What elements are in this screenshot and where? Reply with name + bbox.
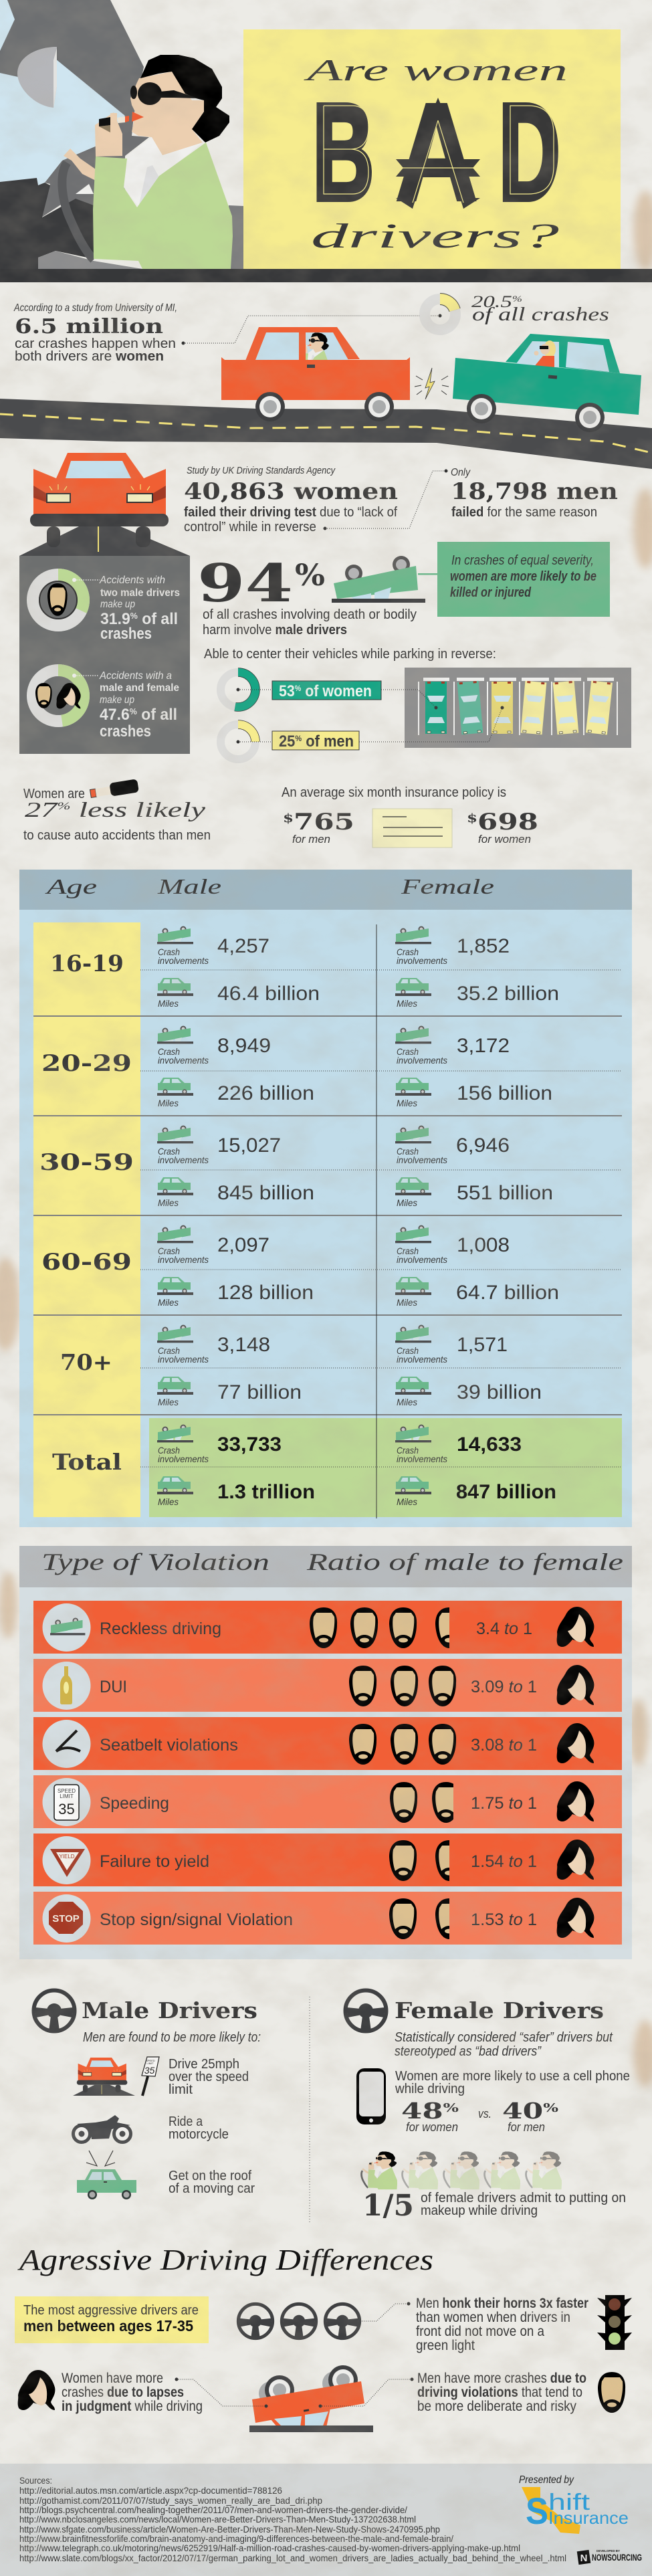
- parking lot illustration: [405, 668, 631, 748]
- intro text: Men are found to be more likely to:: [83, 2030, 261, 2045]
- row: 16-19: Miles: [158, 998, 179, 1009]
- label: 25% of men: [272, 731, 359, 751]
- stat: 27% less likely: %: [57, 801, 71, 812]
- label: 47.6%: crashes: [100, 722, 151, 740]
- stat: 94%: 94: [197, 553, 293, 614]
- row: DUI: 3.09 to 1: [471, 1678, 537, 1696]
- logo: Nowsourcing: DEVELOPED BY: [596, 2549, 620, 2553]
- row: failure to yield: 1.54 to 1: [471, 1852, 537, 1871]
- label: 47.6%: make up: [100, 694, 134, 706]
- logo: Shift Insurance: Presented by: [519, 2474, 574, 2486]
- callout: crash severity: In crashes of equal severity,: [451, 553, 594, 568]
- text: men honk: [416, 2296, 588, 2353]
- stat: 6.5 million crashes: both drivers are women: [15, 349, 164, 364]
- label: 47.6%: [99, 670, 179, 740]
- connector to donut: [182, 316, 440, 345]
- row: 20-29: Miles: [158, 1098, 179, 1108]
- row: 20-29: Crash: [397, 1046, 419, 1057]
- row: 30-59: 6,946: [456, 1134, 510, 1157]
- stat: 6.5 million crashes: [13, 302, 177, 364]
- row: stop sign violation: 1.53 to 1: [471, 1910, 537, 1929]
- sources list: http://blogs.psychcentral.com/healing-together/2011/07/men-and-women-drivers-the-gender-divide/: [19, 2504, 407, 2515]
- text: drive 25mph: over the speed: [169, 2070, 249, 2084]
- sources list: http://gothamist.com/2011/07/07/study_says_women_really_are_bad_dri.php: [19, 2495, 322, 2506]
- section: female drivers: [345, 1991, 630, 2223]
- price for women: [467, 809, 538, 846]
- text: get on the roof: Get on the roof: [169, 2169, 251, 2183]
- green car: [453, 334, 641, 432]
- stat: 27% less likely: less likely: [71, 797, 206, 821]
- callout: most aggressive drivers: men between ages 17-35: [23, 2317, 193, 2335]
- age column: [33, 922, 140, 1517]
- logo: Shift Insurance: S: [526, 2490, 548, 2532]
- sources list: http://www.slate.com/blogs/xx_factor/2012/07/17/german_parking_lot_and_women_drivers_are_ladies_actually_bad_behind_the_wheel_.html: [19, 2553, 566, 2563]
- text: ride a motorcycle: Ride a: [169, 2114, 203, 2129]
- label: 53% of women: %: [295, 684, 302, 693]
- stat: 94%: of all crashes involving death or bodily: [203, 607, 417, 622]
- row: 20-29: involvements: [397, 1055, 447, 1066]
- row: speeding: 1.75 to 1: [471, 1794, 537, 1813]
- row: 30-59: 15,027: [217, 1134, 281, 1157]
- text: drive 25mph: Drive 25mph: [169, 2057, 239, 2072]
- row: 60-69: Crash: [397, 1246, 419, 1256]
- row: 16-19: involvements: [158, 955, 209, 966]
- row: 60-69: Miles: [158, 1297, 179, 1308]
- text: cell phone use: [395, 2069, 630, 2096]
- stat: 27% less likely: 27: [25, 797, 46, 821]
- stat: 1/5 makeup: [362, 2189, 626, 2223]
- stat: 1/5 makeup: 1/5: [362, 2189, 414, 2223]
- row: reckless driving: Reckless driving: [100, 1619, 221, 1638]
- stat: 1/5 makeup: makeup while driving: [421, 2203, 538, 2218]
- total highlight: [149, 1418, 622, 1517]
- stat: 48% vs 40%: for women: [406, 2120, 458, 2134]
- text: women lapses: in judgment while driving: [62, 2399, 203, 2414]
- row: reckless driving: 3.4 to 1: [476, 1619, 532, 1638]
- stat: 48% vs 40%: 40: [502, 2098, 533, 2124]
- row: failure to yield: Failure to yield: [100, 1852, 209, 1871]
- violations header: Ratio of male to female: [306, 1549, 623, 1575]
- row: speeding: 35: [58, 1801, 75, 1817]
- row: 70+: involvements: [158, 1354, 209, 1365]
- panel: violations ratio table: [19, 1546, 632, 1959]
- sources list: http://editorial.autos.msn.com/article.aspx?cp-documentid=788126: [19, 2485, 282, 2496]
- connectors to overturned car: [175, 2377, 413, 2408]
- icon: overturned green car: [332, 556, 425, 603]
- logo: Shift Insurance: [519, 2474, 629, 2534]
- row: 70+: 77 billion: [217, 1381, 302, 1403]
- price for women: $: [467, 811, 477, 825]
- footer band: [0, 2464, 652, 2576]
- row: 16-19: 46.4 billion: [217, 983, 320, 1005]
- pictogram: 1 in 5 women: [362, 2152, 562, 2189]
- row: 30-59: involvements: [158, 1155, 209, 1165]
- row: Total: Total: [52, 1449, 122, 1475]
- panel: crash table by age: [19, 870, 632, 1527]
- row: failure to yield: YIELD: [59, 1854, 75, 1860]
- row: 60-69: [41, 1225, 559, 1308]
- row: speeding: [33, 1775, 622, 1828]
- icon: man head: [598, 2372, 625, 2413]
- stat: 40,863 women failed: 40,863 women: [184, 478, 398, 505]
- row: Total: 14,633: [457, 1433, 522, 1456]
- icon: green car: [77, 2169, 136, 2199]
- stat: 40,863 women failed: Study by UK Driving Standards Agency: [187, 465, 336, 476]
- row: 60-69: Crash: [158, 1246, 180, 1256]
- text: ride a motorcycle: [169, 2114, 229, 2142]
- row: Total: 847 billion: [456, 1481, 556, 1503]
- row: 30-59: involvements: [397, 1155, 447, 1165]
- icon: car and speed limit sign: SPEED: [146, 2059, 155, 2062]
- row: Total: involvements: [158, 1454, 209, 1464]
- icon: cell phone: [356, 2068, 386, 2124]
- text: women lapses: Women have more: [62, 2371, 163, 2386]
- row: Total: Crash: [397, 1445, 419, 1456]
- label: 31.9%: of all: [138, 610, 178, 628]
- row: 16-19: 1,852: [457, 935, 510, 957]
- row: 16-19: Crash: [158, 947, 180, 957]
- stat: 48% vs 40%: vs.: [478, 2107, 492, 2120]
- stat: 27% less likely: to cause auto accidents than men: [23, 828, 211, 843]
- stat: insurance cost: [282, 785, 538, 848]
- stat: 27% less likely: Women are: [23, 787, 85, 801]
- row: 16-19: 35.2 billion: [457, 983, 559, 1005]
- row: 20-29: 20-29: [41, 1050, 132, 1077]
- row: 30-59: [39, 1125, 553, 1208]
- row: DUI: DUI: [100, 1678, 127, 1696]
- row: seatbelt violations: [33, 1717, 622, 1770]
- stat: 6.5 million crashes: According to a study from University of MI,: [13, 302, 177, 314]
- stat: insurance cost: An average six month insurance policy is: [282, 785, 506, 800]
- row: 20-29: 3,172: [457, 1035, 510, 1057]
- icon: lipstick: [90, 779, 139, 799]
- label: 47.6%: 47.6: [100, 706, 131, 724]
- callout: crash severity: women are more likely to be: [450, 569, 596, 584]
- section: male drivers: [33, 1991, 261, 2199]
- stat: 94%: %: [295, 559, 325, 593]
- donut chart: 25% of men: [221, 724, 255, 759]
- row: 60-69: 2,097: [217, 1234, 269, 1256]
- row: 30-59: Crash: [397, 1146, 419, 1157]
- violations header: [19, 1546, 632, 1587]
- intro text: Statistically considered “safer” drivers but: [395, 2030, 613, 2045]
- row: speeding: SPEED: [58, 1788, 76, 1794]
- label: 47.6%: Accidents with a: [99, 670, 172, 682]
- hero illustration: woman driving and applying lipstick: [0, 0, 243, 269]
- row: 16-19: Crash: [397, 947, 419, 957]
- row: seatbelt violations: 3.08 to 1: [471, 1736, 537, 1755]
- row: 70+: [60, 1324, 542, 1407]
- heading: Female Drivers: Female Drivers: [395, 1997, 604, 2023]
- price for women: 698: [477, 809, 538, 835]
- donut chart: 31.9% two male drivers: [33, 575, 100, 625]
- label: 31.9%: crashes: [100, 625, 152, 643]
- row: 60-69: involvements: [397, 1254, 447, 1265]
- intro text: [395, 2030, 613, 2059]
- row: speeding: Speeding: [100, 1794, 169, 1813]
- row: Total: [52, 1425, 556, 1507]
- intro text: stereotyped as “bad drivers”: [395, 2044, 542, 2059]
- stat: 48% vs 40%: 48: [401, 2098, 432, 2124]
- text: men honk: Men honk their horns 3x faster: [416, 2296, 588, 2311]
- row: 30-59: Crash: [158, 1146, 180, 1157]
- row: 16-19: involvements: [397, 955, 447, 966]
- text: women lapses: crashes due to lapses: [62, 2385, 184, 2400]
- connector women to men: [324, 470, 448, 530]
- row: stop sign violation: [33, 1892, 622, 1945]
- label: 31.9%: Accidents with: [99, 575, 165, 586]
- price for women: for women: [478, 833, 531, 846]
- label: 53% of women: [272, 681, 381, 700]
- panel: accident share donuts: [19, 556, 190, 754]
- donut chart: 53% of women: [221, 672, 255, 707]
- donut chart: 47.6% male and female: [33, 670, 99, 721]
- text: men honk: green light: [416, 2338, 475, 2353]
- text: drive 25mph: limit: [169, 2082, 193, 2097]
- table header: Male: [157, 874, 221, 898]
- row: 16-19: 4,257: [217, 935, 269, 957]
- red car: [221, 327, 410, 421]
- text: get on the roof: of a moving car: [169, 2181, 255, 2196]
- text: cell phone use: Women are more likely to use a cell phone: [395, 2069, 630, 2084]
- row: 20-29: [41, 1026, 552, 1108]
- label: 47.6%: male and female: [100, 682, 179, 694]
- row: failure to yield: [33, 1834, 622, 1886]
- row: stop sign violation: STOP: [52, 1913, 80, 1924]
- row: 60-69: 128 billion: [217, 1282, 314, 1304]
- connectors from labels to parked cars: [238, 690, 504, 742]
- icon: steering wheel: [345, 1991, 387, 2031]
- heading: Male Drivers: Male Drivers: [82, 1997, 257, 2023]
- road: [0, 399, 652, 469]
- paper stains: [0, 191, 652, 2087]
- callout: crash severity: killed or injured: [450, 585, 532, 600]
- label: 31.9%: two male drivers: [100, 587, 180, 599]
- table header: Female: [401, 874, 494, 898]
- stat: 40,863 women failed: control” while in reverse: [184, 520, 316, 534]
- stat: 18,798 men failed: Only: [451, 467, 471, 478]
- text: women lapses: [62, 2371, 203, 2414]
- stat: 27% less likely: [23, 787, 211, 843]
- label: 31.9%: make up: [100, 599, 135, 610]
- row: 60-69: involvements: [158, 1254, 209, 1265]
- row: 70+: Crash: [158, 1345, 180, 1356]
- label: 31.9%: %: [130, 611, 138, 621]
- price for men: [283, 809, 354, 846]
- connector: wheels to honk text: [362, 2302, 411, 2321]
- icon: motorcycle: [74, 2115, 131, 2142]
- row: 30-59: Miles: [397, 1197, 417, 1208]
- row: 30-59: 845 billion: [217, 1182, 314, 1204]
- label: 47.6%: %: [130, 706, 137, 716]
- label: 53% of women: of women: [301, 682, 372, 700]
- row: 16-19: Miles: [397, 998, 417, 1009]
- row: Total: Miles: [158, 1496, 179, 1507]
- title line: Are women: Are women: [303, 53, 568, 87]
- price for men: for men: [292, 833, 330, 846]
- stat: 18,798 men failed: failed for the same reason: [451, 505, 597, 520]
- row: 70+: 3,148: [217, 1334, 270, 1356]
- row: 60-69: 64.7 billion: [456, 1282, 559, 1304]
- row: Total: Miles: [397, 1496, 417, 1507]
- icon: three steering wheels: [238, 2304, 360, 2339]
- row: Total: Crash: [158, 1445, 180, 1456]
- stat: 94%: harm involve male drivers: [203, 623, 347, 637]
- row: Total: involvements: [397, 1454, 447, 1464]
- row: 70+: 1,571: [457, 1334, 508, 1356]
- heading: aggressive driving differences: Agressive Driving Differences: [17, 2244, 433, 2276]
- stat: 18,798 men failed: [451, 467, 618, 520]
- text: men honk: front did not move on a: [416, 2324, 544, 2339]
- icon: policy document: [372, 809, 452, 848]
- title word: BAD: B: [312, 76, 374, 229]
- label: 25% of men: 25: [279, 732, 297, 751]
- price for men: $: [283, 811, 294, 825]
- stat: 18,798 men failed: 18,798 men: [451, 478, 618, 505]
- dark band: [0, 269, 652, 282]
- logo: Nowsourcing: N: [580, 2553, 587, 2564]
- stat: 6.5 million crashes: 6.5 million: [15, 315, 163, 338]
- row: stop sign violation: Stop sign/signal Violation: [100, 1910, 293, 1929]
- sources list: http://www.brainfitnessforlife.com/brain-anatomy-and-imaging/9-differences-between-the-male-and-female-brain/: [19, 2533, 453, 2544]
- icon: traffic light: [597, 2295, 632, 2350]
- sources list: http://www.sfgate.com/business/article/Women-Are-Better-Drivers-Than-Men-New-Study-Shows-2470995.php: [19, 2524, 440, 2535]
- icon: car and speed limit sign: [73, 2057, 159, 2096]
- row: 20-29: Crash: [158, 1046, 180, 1057]
- row: 70+: Miles: [397, 1397, 417, 1407]
- label: 31.9%: [99, 575, 180, 643]
- crash spark: [415, 368, 449, 399]
- row: 20-29: Miles: [397, 1098, 417, 1108]
- text: men violations: be more deliberate and risky: [417, 2399, 576, 2414]
- text: men honk: than women when drivers in: [416, 2310, 570, 2325]
- label: 20.5% of all crashes: of all crashes: [472, 304, 609, 325]
- row: 20-29: 8,949: [217, 1035, 271, 1057]
- icon: steering wheel: [33, 1991, 75, 2031]
- logo: Shift Insurance: hift: [548, 2490, 590, 2515]
- stat: 1/5 makeup: of female drivers admit to putting on: [421, 2191, 626, 2205]
- donut chart: 20.5%: [425, 299, 455, 330]
- row: DUI: [33, 1659, 622, 1712]
- sources list: http://www.nbclosangeles.com/news/local/Women-are-Better-Drivers-Than-Men-Study-137202638.html: [19, 2514, 416, 2524]
- stat: 40,863 women failed: failed their driving test due to “lack of: [184, 505, 397, 520]
- text: men violations: Men have more crashes due to: [417, 2371, 586, 2386]
- logo: Nowsourcing: [577, 2549, 642, 2565]
- icon: woman head: [18, 2370, 55, 2410]
- row: 30-59: 30-59: [39, 1149, 134, 1176]
- icon: car and speed limit sign: LIMIT: [146, 2062, 154, 2065]
- row: Total: 1.3 trillion: [217, 1481, 315, 1503]
- icon: arrows pointing to car roof: [86, 2151, 115, 2166]
- label: 25% of men: of men: [302, 732, 354, 751]
- stat: 48% vs 40%: %: [443, 2101, 459, 2115]
- title panel: [243, 29, 621, 269]
- label: 31.9%: 31.9: [100, 610, 132, 628]
- title word: BAD: [312, 75, 560, 229]
- label: 25% of men: %: [295, 734, 302, 743]
- row: 20-29: 156 billion: [457, 1082, 552, 1104]
- table header: Age: [45, 874, 97, 898]
- row: 70+: 70+: [60, 1349, 112, 1375]
- callout: most aggressive drivers: The most aggressive drivers are: [23, 2303, 199, 2318]
- row: 70+: Crash: [397, 1345, 419, 1356]
- front view of red car on road: [19, 453, 190, 556]
- row: 30-59: Miles: [158, 1197, 179, 1208]
- sources list: Sources:: [19, 2475, 52, 2486]
- row: 16-19: [50, 926, 559, 1009]
- icon: car and speed limit sign: 35: [144, 2065, 154, 2076]
- text: ride a motorcycle: motorcycle: [169, 2127, 229, 2142]
- icon: overturned red car: [249, 2365, 373, 2432]
- row: 16-19: 16-19: [50, 951, 124, 977]
- row: 60-69: 60-69: [41, 1249, 132, 1276]
- row: 60-69: 1,008: [457, 1234, 510, 1256]
- label: 20.5% of all crashes: [471, 293, 609, 325]
- title word: BAD: A: [396, 75, 477, 229]
- label: 20.5% of all crashes: %: [512, 294, 522, 304]
- row: 70+: involvements: [397, 1354, 447, 1365]
- callout: crash severity: [418, 542, 610, 617]
- title word: BAD: D: [499, 76, 560, 229]
- stat: 94%: [197, 553, 417, 637]
- text: drive 25mph: [169, 2057, 249, 2097]
- callout: most aggressive drivers: [15, 2296, 209, 2343]
- row: Total: 33,733: [217, 1433, 282, 1456]
- row: reckless driving: [33, 1601, 622, 1654]
- row: 60-69: Miles: [397, 1297, 417, 1308]
- text: cell phone use: while driving: [395, 2082, 465, 2096]
- stat: 40,863 women failed: [184, 465, 398, 534]
- row: 20-29: involvements: [158, 1055, 209, 1066]
- stat: 48% vs 40%: %: [543, 2101, 558, 2115]
- text: men violations: [417, 2371, 586, 2414]
- sources list: http://www.telegraph.co.uk/motoring/news/6252919/Half-a-million-road-crashes-caused-by-women-drivers-applying-make-up.html: [19, 2543, 520, 2553]
- label: 53% of women: 53: [279, 682, 297, 700]
- violations header: Type of Violation: [41, 1549, 269, 1575]
- price for men: 765: [294, 809, 354, 835]
- heading: parking in reverse: Able to center their vehicles while parking in reverse:: [204, 647, 496, 662]
- title line: drivers?: drivers?: [311, 217, 559, 256]
- row: 70+: Miles: [158, 1397, 179, 1407]
- stat: 6.5 million crashes: car crashes happen when: [15, 336, 176, 351]
- label: 47.6%: of all: [137, 706, 177, 724]
- row: seatbelt violations: Seatbelt violations: [100, 1736, 238, 1755]
- row: 70+: 39 billion: [457, 1381, 542, 1403]
- stat: 48% vs 40%: [401, 2098, 558, 2134]
- row: 20-29: 226 billion: [217, 1082, 314, 1104]
- table rules: [33, 924, 622, 1518]
- sources list: [19, 2475, 566, 2563]
- text: get on the roof: [169, 2169, 255, 2196]
- row: 30-59: 551 billion: [457, 1182, 553, 1204]
- logo: Shift Insurance: Insurance: [548, 2508, 629, 2528]
- label: 20.5% of all crashes: 20.5: [471, 293, 501, 311]
- text: men violations: driving violations that tend to: [417, 2385, 582, 2400]
- table header: [19, 870, 632, 910]
- stat: 48% vs 40%: for men: [508, 2120, 545, 2134]
- row: speeding: LIMIT: [60, 1793, 74, 1799]
